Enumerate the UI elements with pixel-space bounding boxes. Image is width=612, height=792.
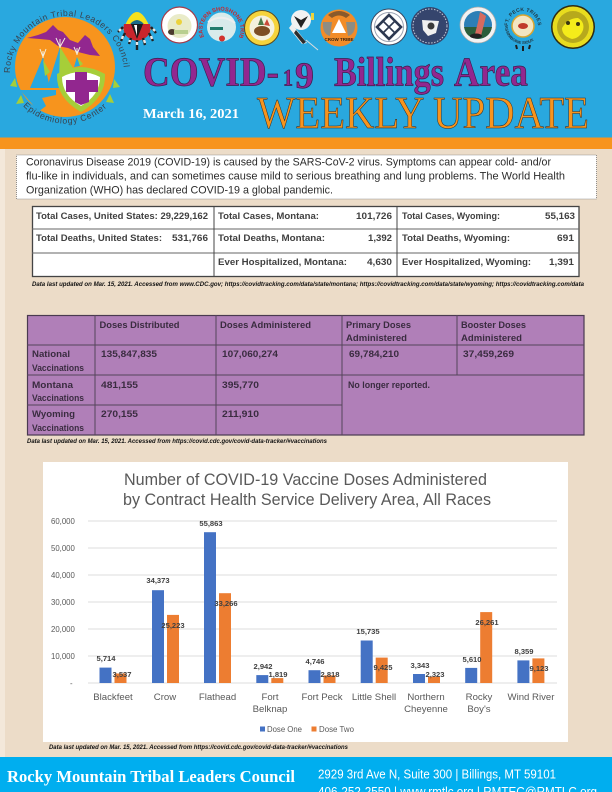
category labels: Belknap (253, 704, 287, 715)
data labels: 34,373 (146, 576, 170, 585)
table: case and death totals: 4,630 (367, 257, 392, 267)
title: COVID-19 Billings Area (143, 48, 528, 97)
source note: chart: Data last updated on Mar. 15, 2021. Accessed from https://covid.cdc.gov/covid-data-tracker/#vaccinations (49, 745, 349, 751)
source note: case table: Data last updated on Mar. 15, 2021. Accessed from www.CDC.gov; https://covidtracking.com/data/state/montana; https://covidtracking.com/data/state/wyoming; https://covidtracking.com/data (32, 282, 585, 288)
table: vaccinations: 211,910 (222, 409, 259, 420)
chart title (123, 471, 491, 509)
table: vaccinations: 270,155 (101, 409, 139, 420)
table: vaccinations: Vaccinations (32, 393, 84, 404)
title: COVID-19 Billings Area: 9 (295, 56, 314, 97)
seal: diamond emblem (371, 9, 407, 45)
data labels: 26,261 (475, 618, 499, 627)
seal: yellow emblem (551, 5, 595, 49)
title: COVID-19 Billings Area: Billings (334, 48, 444, 94)
table: vaccinations: Vaccinations (32, 423, 84, 434)
table: vaccinations: Primary Doses (346, 320, 411, 331)
table: case and death totals: 1,392 (368, 233, 392, 243)
table: case and death totals (32, 206, 579, 277)
table: vaccinations: 481,155 (101, 380, 139, 391)
category labels: Rocky (466, 692, 493, 703)
table: case and death totals: Total Deaths, Montana: (218, 233, 325, 243)
legend: Dose One (267, 725, 302, 734)
logo teepees (30, 38, 83, 88)
seal: Blackfeet shield (118, 12, 156, 50)
y axis labels: 20,000 (51, 625, 76, 634)
bar chart: vaccine doses by service area (43, 462, 568, 742)
y axis labels (51, 517, 76, 688)
source note: vaccination table: Data last updated on Mar. 15, 2021. Accessed from https://covid.cdc.gov/covid-data-tracker/#vaccinations (27, 439, 328, 445)
dose two bars (114, 593, 544, 683)
seal: Fort Peck Tribes (504, 8, 542, 51)
data labels: 2,323 (425, 670, 445, 679)
category labels: Fort (261, 692, 279, 703)
intro text panel: Coronavirus Disease 2019 (COVID-19) is caused by the SARS-CoV-2 virus. Symptoms can appear cold- and/or (26, 156, 551, 168)
table: case and death totals: 55,163 (545, 211, 575, 221)
y axis labels: 60,000 (51, 517, 76, 526)
table: vaccinations: 37,459,269 (463, 349, 514, 360)
logo lower ring text: Epidemiology Center (24, 102, 106, 126)
category labels (93, 692, 555, 715)
table: vaccinations: 135,847,835 (101, 349, 158, 360)
table: vaccinations: Wyoming (32, 409, 75, 420)
table: vaccinations: Booster Doses (461, 320, 526, 331)
legend: Dose Two (319, 725, 355, 734)
seal: tribal seal 2 (162, 7, 198, 43)
y axis labels: 40,000 (51, 571, 76, 580)
data labels: 2,942 (253, 662, 273, 671)
table: case and death totals: Ever Hospitalized, Wyoming: (402, 257, 531, 267)
seal: Fort Peck Tribes: FT. PECK TRIBES (504, 8, 542, 26)
date: March 16, 2021 (143, 107, 239, 122)
title: COVID-19 Billings Area: Area (454, 48, 528, 94)
category labels: Little Shell (352, 692, 396, 703)
table: vaccinations: 107,060,274 (222, 349, 279, 360)
table: case and death totals: 531,766 (172, 233, 208, 243)
table: vaccinations: Montana (32, 380, 74, 391)
data labels: 9,425 (373, 663, 393, 672)
data labels (96, 519, 549, 679)
data labels: 4,746 (305, 657, 325, 666)
title: COVID-19 Billings Area: COVID- (143, 48, 279, 94)
table: vaccinations: National (32, 349, 70, 360)
intro text panel: Organization (WHO) has declared COVID-19 a global pandemic. (26, 184, 333, 196)
table: vaccinations: Doses Distributed (100, 320, 180, 331)
table: case and death totals: Total Deaths, Wyoming: (402, 233, 510, 243)
table: case and death totals: 101,726 (356, 211, 392, 221)
table: case and death totals: Total Cases, United States: 29,229,162 (36, 211, 208, 221)
category labels: Cheyenne (404, 704, 448, 715)
data labels: 8,359 (514, 647, 534, 656)
category labels: Flathead (199, 692, 236, 703)
seal: blue and white (460, 7, 496, 43)
seal: Fort Peck Tribes: ASSINIBOINE SIOUX (505, 26, 534, 44)
table: vaccinations (27, 315, 584, 435)
intro text panel (16, 155, 596, 199)
y axis labels: 50,000 (51, 544, 76, 553)
table: vaccinations: Administered (461, 333, 522, 344)
category labels: Northern (407, 692, 445, 703)
chart title: by Contract Health Service Delivery Area, All Races (123, 491, 491, 509)
table: case and death totals: Total Cases, Wyoming: (402, 211, 500, 221)
data labels: 15,735 (356, 627, 380, 636)
category labels: Blackfeet (93, 692, 133, 703)
data labels: 5,610 (462, 655, 482, 664)
data labels: 3,343 (410, 661, 430, 670)
address: 2929 3rd Ave N, Suite 300 | Billings, MT 59101 (318, 766, 556, 782)
table: vaccinations: No longer reported. (348, 380, 430, 391)
logo ring text: Rocky Mountain Tribal Leaders Council (4, 10, 130, 72)
data labels: 33,266 (214, 599, 238, 608)
table: case and death totals: 691 (557, 233, 574, 243)
logo: Rocky Mountain Tribal Leaders Council (4, 10, 130, 117)
data labels: 3,537 (112, 670, 132, 679)
category labels: Crow (154, 692, 176, 703)
y axis labels: - (70, 679, 73, 688)
legend (260, 725, 355, 734)
intro text panel: flu-like in individuals, and can sometimes cause mild to serious breathing and lung problems. The World Health (26, 170, 565, 182)
seal: Crow Tribe (320, 10, 358, 46)
chart title: Number of COVID-19 Vaccine Doses Administered (124, 471, 487, 489)
data labels: 5,714 (96, 654, 116, 663)
table: vaccinations: Administered (346, 333, 407, 344)
table: vaccinations: 395,770 (222, 380, 259, 391)
footer (0, 757, 612, 792)
table: vaccinations: Doses Administered (220, 320, 311, 331)
seal: navy ring (411, 7, 449, 45)
data labels: 1,819 (268, 670, 288, 679)
category labels: Fort Peck (301, 692, 343, 703)
data labels: 25,223 (161, 621, 185, 630)
y axis labels: 10,000 (51, 652, 76, 661)
header banner (0, 0, 612, 149)
table: vaccinations: 69,784,210 (349, 349, 399, 360)
table: case and death totals: Ever Hospitalized, Montana: (218, 257, 347, 267)
category labels: Boy's (467, 704, 491, 715)
table: case and death totals: 1,391 (549, 257, 574, 267)
table: vaccinations: Vaccinations (32, 363, 84, 374)
data labels: 2,818 (320, 670, 340, 679)
logo shield (57, 67, 105, 112)
logo mountains (27, 25, 100, 56)
table: case and death totals: Total Deaths, United States: (36, 233, 162, 243)
data labels: 55,863 (199, 519, 223, 528)
seal: bison ring (244, 10, 280, 46)
organisation name: Rocky Mountain Tribal Leaders Council (7, 767, 295, 786)
data labels: 9,123 (529, 664, 549, 673)
seal: Crow Tribe: CROW TRIBE (324, 37, 354, 42)
category labels: Wind River (508, 692, 555, 703)
dose one bars (100, 532, 529, 683)
title: COVID-19 Billings Area: 1 (283, 66, 293, 90)
seal: eagle feathers (289, 10, 318, 50)
y axis labels: 30,000 (51, 598, 76, 607)
table: case and death totals: Total Cases, Montana: (218, 211, 319, 221)
seal: Eastern Shoshone Tribe (198, 6, 244, 42)
